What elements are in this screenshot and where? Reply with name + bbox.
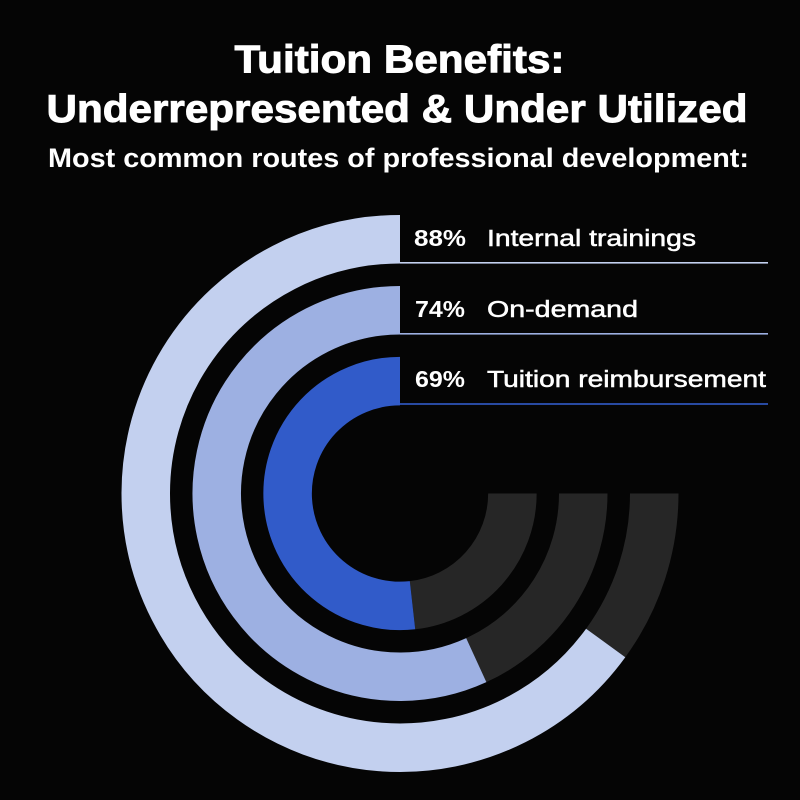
label: on-demand [400,296,768,335]
subtitle: Most common routes of professional development: [48,143,749,173]
radial bar chart [146,239,654,748]
title: Tuition Benefits: [234,38,564,82]
ring: internal trainings 88% [146,239,606,748]
title [46,38,748,131]
title: Underrepresented & Under Utilized [46,88,748,131]
label: internal trainings: Internal trainings [487,225,696,251]
label: tuition reimbursement: Tuition reimbursement [487,366,767,392]
ring: tuition reimbursement track [413,494,512,605]
label: on-demand: On-demand [487,296,638,322]
ring: on-demand 74% [217,310,476,677]
label: tuition reimbursement: 69% [415,366,465,392]
label: tuition reimbursement [400,366,768,405]
ring: internal trainings track [606,494,654,643]
label: internal trainings [400,225,768,264]
label: on-demand: 74% [415,296,465,322]
ring: tuition reimbursement 69% [288,381,413,606]
ring: on-demand track [476,494,583,660]
label: internal trainings: 88% [414,225,466,251]
